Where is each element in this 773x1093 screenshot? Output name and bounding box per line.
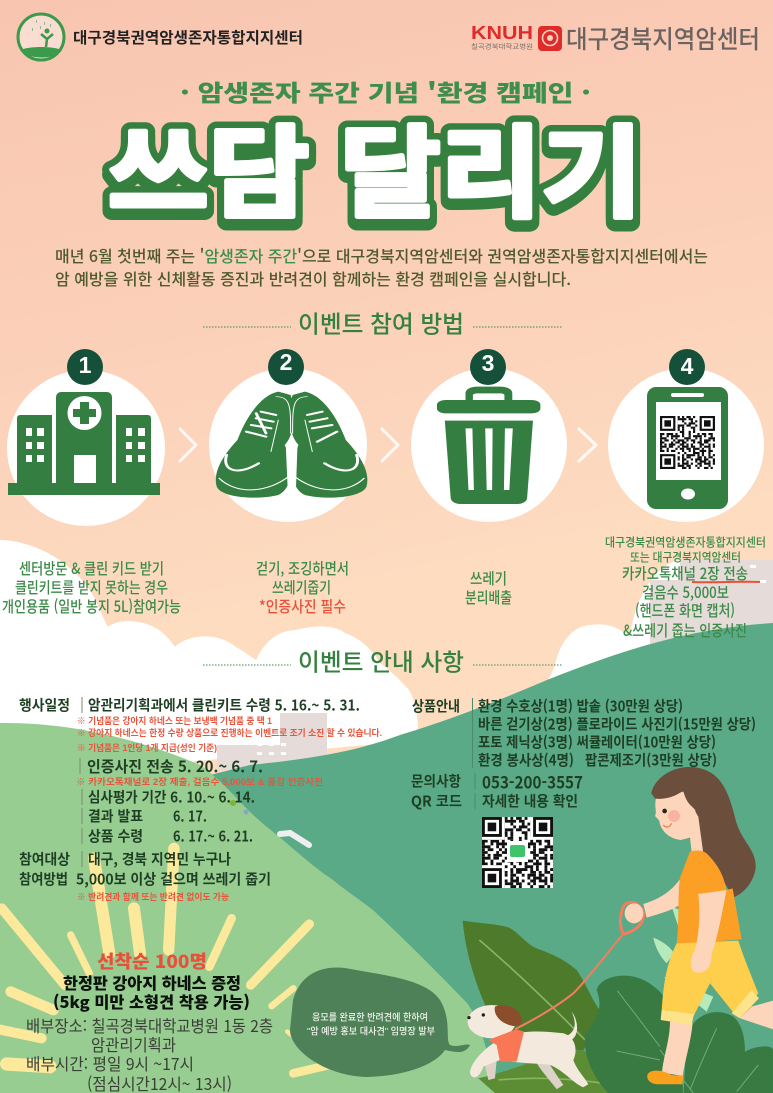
step 2 text: 걷기, 조깅하면서 [256,557,349,579]
prize details: 환경 수호상(1명) 밥솥 (30만원 상당) [478,696,683,716]
step 4 text: &쓰레기 줍는 인증사진 [623,619,747,641]
logo: KNUH: 대구경북지역암센터 [566,20,760,56]
step 4 text [605,534,766,641]
schedule details: ※ 기념품은 1인당 1개 지급(성인 기준) [77,742,217,753]
step 3 text: 쓰레기 [470,567,507,589]
illustration: girl walking [515,767,773,1084]
illustration: dog [467,1005,588,1089]
step 4 text: (핸드폰 화면 캡처) [635,599,735,621]
speech bubble [290,967,470,1077]
bubble text: "암 예방 홍보 대사견" 임명장 발부 [307,1026,435,1038]
schedule details: ※ 반려견과 함께 또는 반려견 없이도 가능 [77,891,229,902]
schedule details: 암관리기획과에서 클린키트 수령 5. 16.~ 5. 31. [88,694,360,716]
prize details: QR 코드 [411,790,462,812]
prize details: 환경 봉사상(4명) [478,750,574,770]
icon: trash can [437,387,540,504]
prize details: 바른 걷기상(2명) 플로라이드 사진기(15만원 상당) [478,714,756,734]
arrows between steps [180,429,596,461]
giveaway text: 한정판 강아지 하네스 증정 [63,970,241,994]
leaves behind the girl and dog [463,907,773,1093]
schedule details: ※ 카카오톡채널로 2장 제출, 걸음수 5,000보 & 플깅 인증사진 [76,776,323,787]
schedule details: 참여대상 [19,848,70,870]
prize details: 포토 제닉상(3명) 써큘레이터(10만원 상당) [478,732,716,752]
teal hill [150,623,773,1093]
icon: hospital [8,392,160,495]
schedule details: 대구, 경북 지역민 누구나 [88,848,231,870]
step 3 text [465,567,512,608]
giveaway text: 배부시간: 평일 9시 ~17시 [26,1051,194,1075]
step 2 text: 쓰레기줍기 [272,576,331,598]
distant buildings [217,560,773,770]
light green hill [0,723,497,1093]
giveaway text: 선착순 100명 [97,948,207,974]
prize details [411,696,756,812]
step circles [7,368,764,526]
step 1 text [2,557,181,617]
icon: shoes [216,392,367,500]
schedule details: 심사평가 기간 6. 10.~ 6. 14. [88,786,255,808]
introduction text: 매년 6월 첫번째 주는 '암생존자 주간'으로 대구경북지역암센터와 권역암생존자통합지지센터에서는 [55,243,708,267]
prize details: 자세한 내용 확인 [482,790,578,812]
white clouds [0,540,700,780]
step 3 text: 분리배출 [465,586,512,608]
prize details: 상품안내 [412,696,460,716]
step numbers: 3 [482,350,494,376]
icon: phone [647,387,728,509]
bubble text [307,1012,435,1038]
section heading: event information: 이벤트 안내 사항 [298,642,464,678]
schedule details: ※ 기념품은 강아지 하네스 또는 보냉백 기념품 중 택 1 [77,715,272,726]
schedule details: ※ 강아지 하네스는 한정 수량 상품으로 진행하는 이벤트로 조기 소진 할 수 있습니다. [77,727,382,738]
step 4 text: 카카오톡채널 2장 전송 [622,562,748,584]
step numbers: 4 [681,353,694,379]
schedule details [19,694,382,902]
bubble text: 응모를 완료한 반려견에 한하여 [312,1012,428,1024]
section heading: how to participate: 이벤트 참여 방법 [298,304,464,340]
schedule details: 상품 수령 [88,826,143,846]
step 2 text: *인증사진 필수 [259,595,346,617]
logo: KNUH [471,20,760,56]
step numbers: 2 [280,349,292,375]
logo: KNUH: 칠곡경북대학교병원 [471,42,533,50]
schedule details: 결과 발표 [88,806,143,826]
prize details: 문의사항 [411,770,461,792]
giveaway text: (5kg 미만 소형견 착용 가능) [53,989,250,1013]
step numbers: 1 [79,352,92,378]
introduction text [55,243,708,290]
step number badges [67,349,705,385]
schedule details: 5,000보 이상 걸으며 쓰레기 줍기 [76,868,271,890]
subtitle: · 암생존자 주간 기념 '환경 캠페인 · [180,74,591,108]
step 1 text: 센터방문 & 클린 키드 받기 [19,557,164,579]
step 1 text: 개인용품 (일반 봉지 5L)참여가능 [2,595,181,617]
prize details: 팝콘제조기(3만원 상당) [585,750,717,770]
logo: survivorship centre [18,14,64,60]
schedule details: 6. 17. [173,806,207,826]
step 4 text: 또는 대구경북지역암센터 [630,548,741,566]
schedule details: 6. 17.~ 6. 21. [173,826,253,846]
yellow sunburst rays [0,848,333,1073]
logo text: survivorship centre: 대구경북권역암생존자통합지지센터 [73,26,303,48]
main title: 쓰담 달리기 [108,92,642,238]
schedule details: 인증사진 전송 5. 20.~ 6. 7. [87,755,263,777]
step 4 text: 걸음수 5,000보 [642,581,729,603]
step 1 text: 클린키트를 받지 못하는 경우 [15,576,168,598]
prize details: 053-200-3557 [482,768,583,794]
main title: 쓰담 달리기 [108,98,642,242]
schedule details: 참여방법 [19,868,68,890]
QR code [482,817,553,888]
small hill objects [230,800,309,845]
giveaway text: 배부장소: 칠곡경북대학교병원 1동 2층 [26,1013,273,1037]
introduction text: 암 예방을 위한 신체활동 증진과 반려견이 함께하는 환경 캠페인을 실시합니다. [55,266,571,290]
giveaway text: 암관리기획과 [91,1032,176,1056]
step 2 text [256,557,349,617]
giveaway text [26,948,273,1093]
step numbers [79,349,694,379]
main title: 쓰담 달리기 [108,92,642,238]
logo: KNUH: KNUH [471,23,533,43]
schedule details: 행사일정 [19,694,70,716]
